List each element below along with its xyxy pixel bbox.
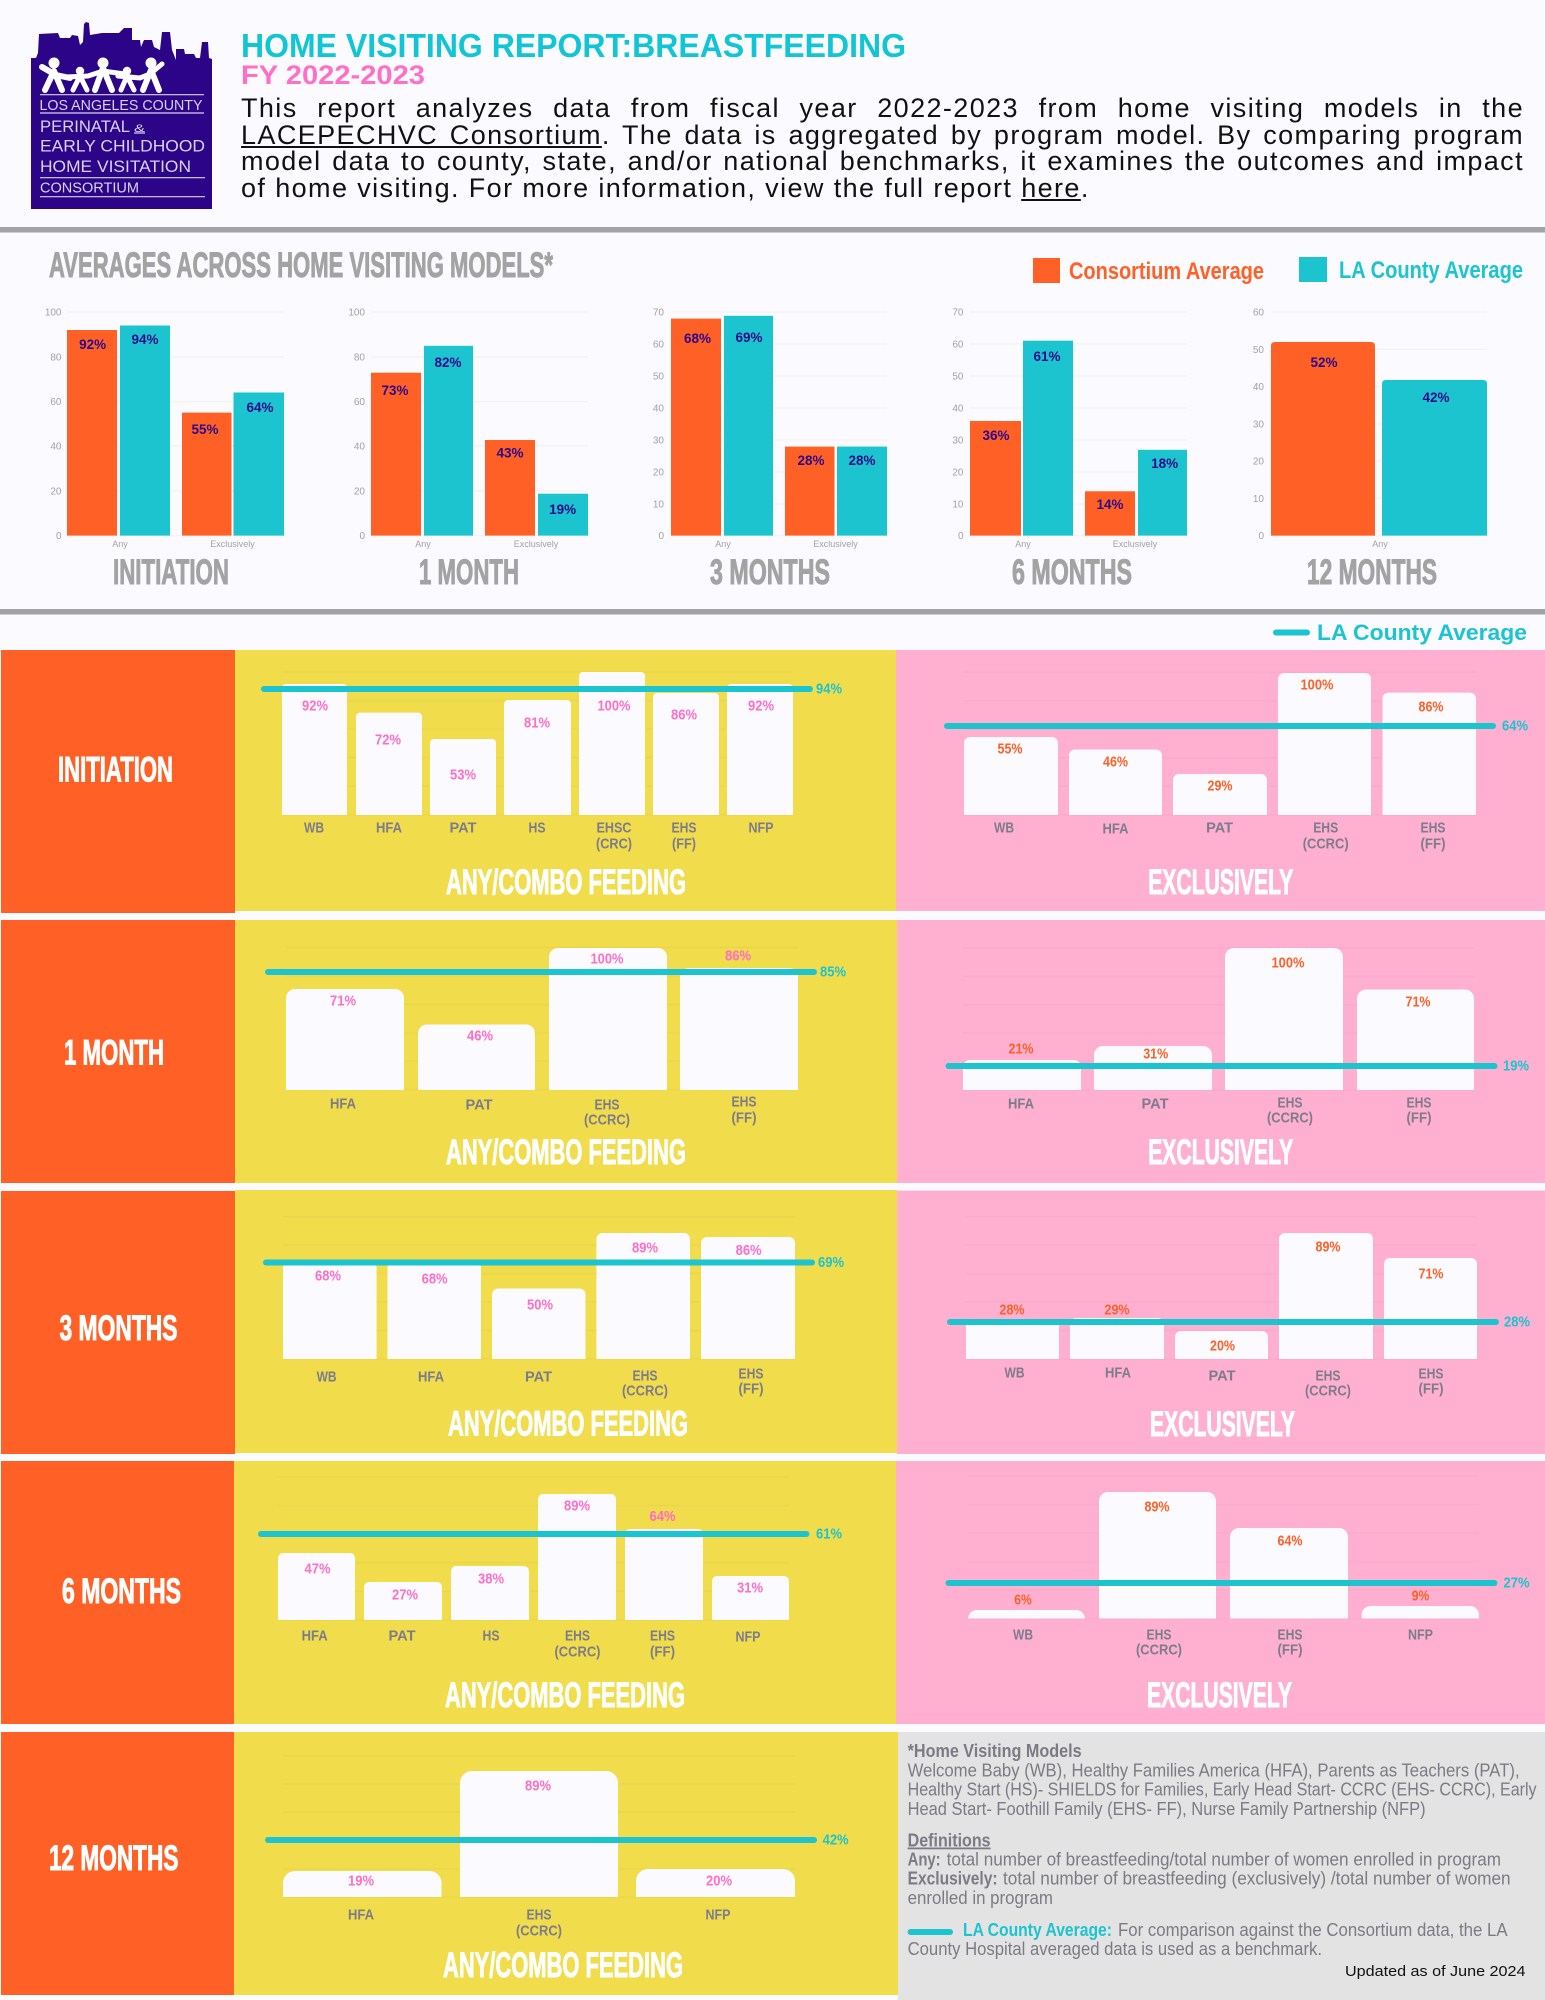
value labels: 53% [450,766,476,784]
value labels: 100% [1272,954,1304,972]
subtitle: FY 2022-2023 [241,60,425,90]
value labels: 9% [1412,1588,1429,1604]
bar chart: 3 months averages: 68% [684,330,712,346]
benchmark line: 64% [1502,718,1528,734]
category labels: PAT [466,1096,492,1114]
bars [286,948,798,1090]
logo: LOS ANGELES COUNTY [40,97,202,114]
heading: ANY/COMBO FEEDING [443,1946,683,1985]
category labels: (CCRC) [516,1922,562,1940]
value labels: 68% [315,1268,341,1284]
bar chart: 3 months averages: 20 [653,468,664,478]
category labels: EHS [526,1906,552,1924]
bar chart: 12 months averages [1253,308,1487,592]
category labels: WB [304,820,324,836]
category labels: (CCRC) [1267,1110,1313,1126]
benchmark line [944,718,1528,734]
category labels: PAT [525,1368,552,1386]
panel: notes and definitions [898,1732,1545,2000]
benchmark line: 42% [823,1832,849,1848]
logo: HOME VISITATION [40,157,191,176]
LA County average note: LA County Average: [963,1920,1112,1940]
value labels: 29% [1104,1302,1130,1318]
heading: EXCLUSIVELY [1148,1133,1293,1172]
category labels: (CCRC) [554,1644,600,1660]
bar chart: 6 months averages: 70 [952,308,964,318]
category labels: (CCRC) [1303,836,1349,852]
bar chart: 3 months averages: 60 [653,340,664,350]
panel: initiation row label: INITIATION [58,750,173,790]
heading: EXCLUSIVELY [1147,1676,1292,1715]
category labels: (CCRC) [1136,1642,1182,1658]
panel: initiation any/combo feeding [235,650,896,911]
bar chart: 12 months averages: 50 [1253,345,1264,356]
bar chart: 6 months averages: 60 [952,340,964,350]
panel: 3 months row label: 3 MONTHS [60,1309,178,1348]
benchmark line [947,1314,1530,1330]
value labels: 21% [1008,1040,1034,1058]
text block: intro [241,93,1524,202]
bar chart: 3 months averages: Any [715,539,731,549]
text block: intro: model data to county, state, and/or national benchmarks, it examines the outcomes and impact [241,146,1524,176]
bar chart: 3 months averages: 50 [653,372,664,382]
bar chart: 6 months averages: Exclusively [1113,539,1158,549]
panel: 3 months exclusively [897,1191,1545,1454]
bar chart: 1 month averages: 0 [359,531,365,542]
category labels: EHS [632,1368,658,1384]
category labels: NFP [736,1628,760,1646]
bar chart: 12 months averages: Any [1372,539,1388,549]
bar chart: 6 months averages: 6 MONTHS [1012,553,1132,592]
divider middle [0,609,1545,614]
bar chart: 1 month averages: 60 [354,397,365,408]
bar chart: 1 month averages: 82% [434,354,462,370]
value labels [1008,954,1430,1062]
panel: initiation row label [1,650,235,913]
definitions: Any: [908,1850,941,1870]
definitions: total number of breastfeeding/total number of women enrolled in program [947,1850,1501,1870]
value labels: 20% [1210,1338,1235,1354]
bar chart: 1 month averages [348,308,588,592]
bar chart: 12 months averages: 60 [1253,308,1264,318]
category labels: HFA [1105,1364,1131,1382]
panel: 6 months any/combo feeding [234,1461,897,1724]
category labels [994,820,1446,852]
value labels: 89% [1144,1498,1170,1516]
category labels: (FF) [1278,1642,1302,1658]
category labels: EHS [650,1628,675,1644]
value labels: 27% [392,1586,418,1604]
value labels: 71% [330,992,356,1010]
panel: 3 months any/combo feeding [235,1190,897,1453]
value labels: 46% [1103,754,1128,770]
benchmark line [265,964,846,980]
category labels [317,1366,764,1400]
benchmark line [265,1832,849,1848]
bar chart: initiation averages: Any [112,539,128,549]
bar chart: 1 month averages: Any [415,539,431,549]
bar chart: 3 months averages [653,308,887,592]
value labels: 86% [1418,698,1444,716]
bar chart: initiation averages: 40 [50,442,62,452]
category labels: EHS [1420,820,1446,836]
bar chart: 6 months averages: 40 [952,404,964,414]
bar chart: 6 months averages: 0 [958,531,964,542]
value labels: 28% [1000,1302,1024,1318]
panel: 6 months row label [1,1461,234,1724]
benchmark line: 85% [820,964,846,980]
bar chart: 12 months averages: 20 [1253,456,1264,468]
bar chart: 12 months averages: 40 [1253,382,1264,393]
value labels: 31% [737,1580,763,1596]
category labels: (FF) [1418,1380,1444,1398]
benchmark line [946,1574,1530,1592]
bars [963,948,1474,1090]
bar chart: 6 months averages: 30 [952,436,964,446]
category labels: EHS [672,820,696,836]
panel: 1 month exclusively [897,920,1545,1183]
bars [278,1494,789,1620]
category labels: HFA [302,1628,328,1644]
category labels: EHS [1418,1366,1444,1382]
value labels: 47% [304,1560,330,1578]
bar chart: 3 months averages: 28% [798,452,825,468]
value labels [304,1498,763,1604]
category labels: (FF) [672,836,696,852]
legend: consortium average: Consortium Average [1069,258,1264,285]
bar chart: initiation averages: 0 [56,531,62,542]
value labels [1000,1238,1444,1354]
bar chart: initiation averages: 20 [50,486,62,498]
bar chart: 6 months averages: 20 [952,468,964,478]
value labels: 100% [1300,676,1334,694]
value labels: 92% [748,698,774,714]
heading: averages: AVERAGES ACROSS HOME VISITING MODELS* [49,246,553,285]
bars [968,1492,1479,1618]
bar chart: 3 months averages: 3 MONTHS [710,553,830,592]
definitions: Exclusively: [908,1869,998,1889]
bar chart: 1 month averages: 100 [348,308,365,318]
value labels: 86% [725,948,751,964]
value labels: 50% [527,1296,553,1314]
category labels: HFA [418,1368,444,1386]
bar chart: 1 month averages: 19% [549,501,577,517]
category labels: EHS [1316,1368,1340,1384]
benchmark line [946,1058,1529,1074]
category labels: EHS [594,1096,620,1114]
definitions: enrolled in program [908,1888,1053,1908]
category labels [348,1906,730,1940]
bars [283,1771,795,1897]
bar chart: 12 months averages: 10 [1253,494,1264,505]
bar chart: 6 months averages: 18% [1151,455,1179,471]
value labels: 81% [524,714,550,732]
category labels: WB [1013,1626,1033,1644]
category labels: WB [994,820,1014,836]
category labels: HFA [1008,1096,1034,1112]
bar chart: 6 months averages: 36% [982,427,1010,443]
logo [31,22,212,209]
category labels: PAT [1208,1368,1236,1384]
category labels: EHS [1278,1626,1302,1644]
value labels: 64% [650,1508,676,1525]
value labels: 31% [1143,1046,1168,1062]
category labels: (FF) [732,1110,756,1126]
category labels: HFA [348,1906,374,1924]
category labels: EHS [1146,1626,1172,1644]
panel: 1 month any/combo feeding [235,920,897,1183]
bar chart: initiation averages: 60 [50,397,62,408]
bar chart: 12 months averages: 42% [1422,389,1450,405]
value labels: 89% [632,1240,658,1256]
definitions: total number of breastfeeding (exclusively) /total number of women [1003,1869,1511,1889]
panel: 3 months row label [1,1191,235,1454]
bars [964,673,1476,815]
bar chart: initiation averages [45,308,284,592]
bar chart: 3 months averages: 10 [653,500,664,510]
value labels: 89% [564,1498,590,1514]
bar chart: initiation averages: Exclusively [210,539,255,549]
value labels: 86% [671,706,697,724]
bar chart: initiation averages: 92% [79,336,107,352]
home visiting models note: Head Start- Foothill Family (EHS- FF), Nurse Family Partnership (NFP) [908,1799,1426,1819]
benchmark line [263,1254,844,1271]
category labels: PAT [450,820,476,836]
logo: PERINATAL [40,117,130,136]
benchmark line [258,1526,842,1542]
category labels: NFP [706,1906,730,1924]
updated date: Updated as of June 2024 [1345,1963,1526,1980]
benchmark line: 69% [818,1254,844,1271]
category labels: EHS [1278,1094,1302,1112]
panel: initiation exclusively [896,650,1545,911]
value labels: 86% [736,1242,762,1259]
bars [966,1233,1477,1359]
category labels [330,1094,756,1128]
category labels: PAT [1206,820,1233,836]
bar chart: 1 month averages: 1 MONTH [419,553,519,592]
bar chart: 12 months averages: 0 [1258,531,1264,542]
bar chart: 3 months averages: 70 [653,308,664,318]
benchmark line [261,680,842,698]
definitions: Definitions [908,1830,991,1850]
bar chart: 6 months averages: Any [1015,539,1031,549]
category labels: PAT [1142,1096,1168,1112]
category labels [1004,1364,1444,1400]
heading: EXCLUSIVELY [1150,1405,1295,1444]
category labels: HFA [376,820,402,836]
bar chart: 6 months averages: 61% [1034,348,1061,364]
panel: 12 months any/combo feeding [234,1732,898,1995]
logo: & [134,123,146,135]
text block: intro: of home visiting. For more information, view the full report here. [241,172,1090,202]
bar chart: 3 months averages: 28% [848,452,876,468]
heading: EXCLUSIVELY [1148,863,1293,902]
logo: CONSORTIUM [40,181,139,197]
benchmark line: 94% [816,680,842,698]
value labels: 55% [998,740,1022,758]
category labels: HS [528,820,546,836]
category labels: (FF) [1406,1110,1432,1126]
category labels [1013,1626,1433,1658]
panel: 6 months exclusively [896,1461,1545,1724]
value labels: 89% [1316,1238,1340,1256]
bar chart: 3 months averages: 0 [658,531,664,542]
category labels: (FF) [650,1644,675,1660]
category labels: EHS [738,1366,764,1382]
panel: 6 months row label: 6 MONTHS [62,1572,181,1611]
bar chart: 3 months averages: 69% [736,329,763,345]
bar chart: 1 month averages: 43% [496,445,524,461]
category labels: (FF) [1420,836,1446,852]
bar chart: 6 months averages: 14% [1096,496,1124,512]
category labels: WB [1004,1364,1025,1382]
bar chart: initiation averages: 80 [50,352,62,364]
category labels: HFA [1102,820,1129,838]
heading: ANY/COMBO FEEDING [445,1676,685,1715]
LA County average note [908,1920,1508,1959]
bar chart: 3 months averages: 30 [653,436,664,446]
LA County average note: County Hospital averaged data is used as a benchmark. [908,1939,1322,1959]
bar chart: initiation averages: 55% [192,421,219,437]
bar chart: 1 month averages: 80 [354,352,365,364]
home visiting models note [908,1741,1537,1819]
category labels: PAT [388,1628,416,1644]
bar chart: 1 month averages: Exclusively [514,539,559,549]
benchmark line: 19% [1503,1058,1529,1074]
value labels [315,1240,762,1314]
category labels: NFP [1408,1626,1433,1644]
panel: 1 month row label [1,920,235,1183]
bar chart: 12 months averages: 52% [1310,354,1338,370]
value labels [998,676,1444,794]
bar chart: 6 months averages: 50 [952,372,964,382]
divider top [0,227,1545,232]
value labels: 71% [1418,1266,1444,1282]
LA County average note: For comparison against the Consortium data, the LA [1118,1920,1508,1940]
category labels: NFP [748,820,774,836]
panel: 1 month row label: 1 MONTH [64,1034,164,1072]
heading: ANY/COMBO FEEDING [446,863,686,902]
category labels: HS [482,1628,500,1644]
category labels: (CCRC) [1305,1382,1351,1400]
benchmark line: 28% [1504,1314,1530,1330]
bar chart: initiation averages: INITIATION [113,553,229,592]
value labels: 89% [525,1778,551,1794]
bars [283,1233,795,1359]
category labels: (CCRC) [622,1382,668,1400]
bar chart: initiation averages: 100 [45,308,62,318]
heading: ANY/COMBO FEEDING [448,1404,688,1444]
value labels: 72% [375,732,401,748]
bar chart: 1 month averages: 20 [354,486,365,498]
title: HOME VISITING REPORT:BREASTFEEDING [241,27,906,64]
category labels [304,820,774,852]
logo: EARLY CHILDHOOD [40,137,205,156]
category labels: HFA [330,1096,356,1112]
value labels [330,948,751,1044]
text block: intro: LACEPECHVC Consortium. The data is aggregated by program model. By comparing program [241,120,1524,150]
category labels: EHS [732,1094,756,1110]
bar chart: initiation averages: 94% [132,331,159,347]
bar chart: 1 month averages: 40 [354,442,365,452]
panel: 12 months row label: 12 MONTHS [49,1839,178,1878]
value labels: 92% [302,698,328,714]
value labels: 46% [467,1028,493,1044]
bar chart: 12 months averages: 12 MONTHS [1307,553,1437,592]
bar chart: initiation averages: 64% [246,399,274,415]
value labels: 19% [348,1872,374,1890]
heading: ANY/COMBO FEEDING [446,1133,686,1172]
value labels: 64% [1278,1532,1302,1550]
bars [282,672,793,815]
value labels [302,698,774,784]
bar chart: 6 months averages: 10 [952,500,964,510]
text block: intro: This report analyzes data from fiscal year 2022-2023 from home visiting models in the [241,93,1524,123]
value labels: 100% [590,950,624,968]
category labels [1008,1094,1432,1126]
category labels: (CCRC) [584,1112,630,1128]
bar chart: 3 months averages: 40 [653,404,664,414]
value labels: 29% [1208,778,1232,794]
category labels: EHS [565,1628,590,1644]
value labels [1014,1498,1429,1608]
value labels: 68% [422,1270,448,1288]
home visiting models note: *Home Visiting Models [908,1741,1082,1761]
category labels: (FF) [738,1380,764,1398]
bar chart: 12 months averages: 30 [1253,420,1264,430]
bar chart: 3 months averages: Exclusively [813,539,858,549]
value labels: 100% [598,698,630,714]
bar chart: 1 month averages: 73% [382,382,409,398]
category labels [302,1628,760,1660]
panel: 12 months row label [1,1732,234,1995]
value labels: 6% [1014,1592,1032,1608]
category labels: EHSC [596,820,632,836]
category labels: WB [317,1368,337,1386]
benchmark line: 61% [816,1526,842,1542]
bar chart: 6 months averages [952,308,1187,592]
value labels [348,1778,732,1890]
benchmark line: 27% [1504,1574,1530,1592]
definitions [908,1830,1511,1908]
value labels: 38% [478,1570,504,1588]
category labels: EHS [1406,1094,1432,1112]
value labels: 71% [1406,994,1430,1010]
legend: LA County average line: LA County Average [1317,620,1527,645]
category labels: EHS [1313,820,1338,836]
category labels: (CRC) [596,836,632,852]
value labels: 20% [706,1872,732,1890]
